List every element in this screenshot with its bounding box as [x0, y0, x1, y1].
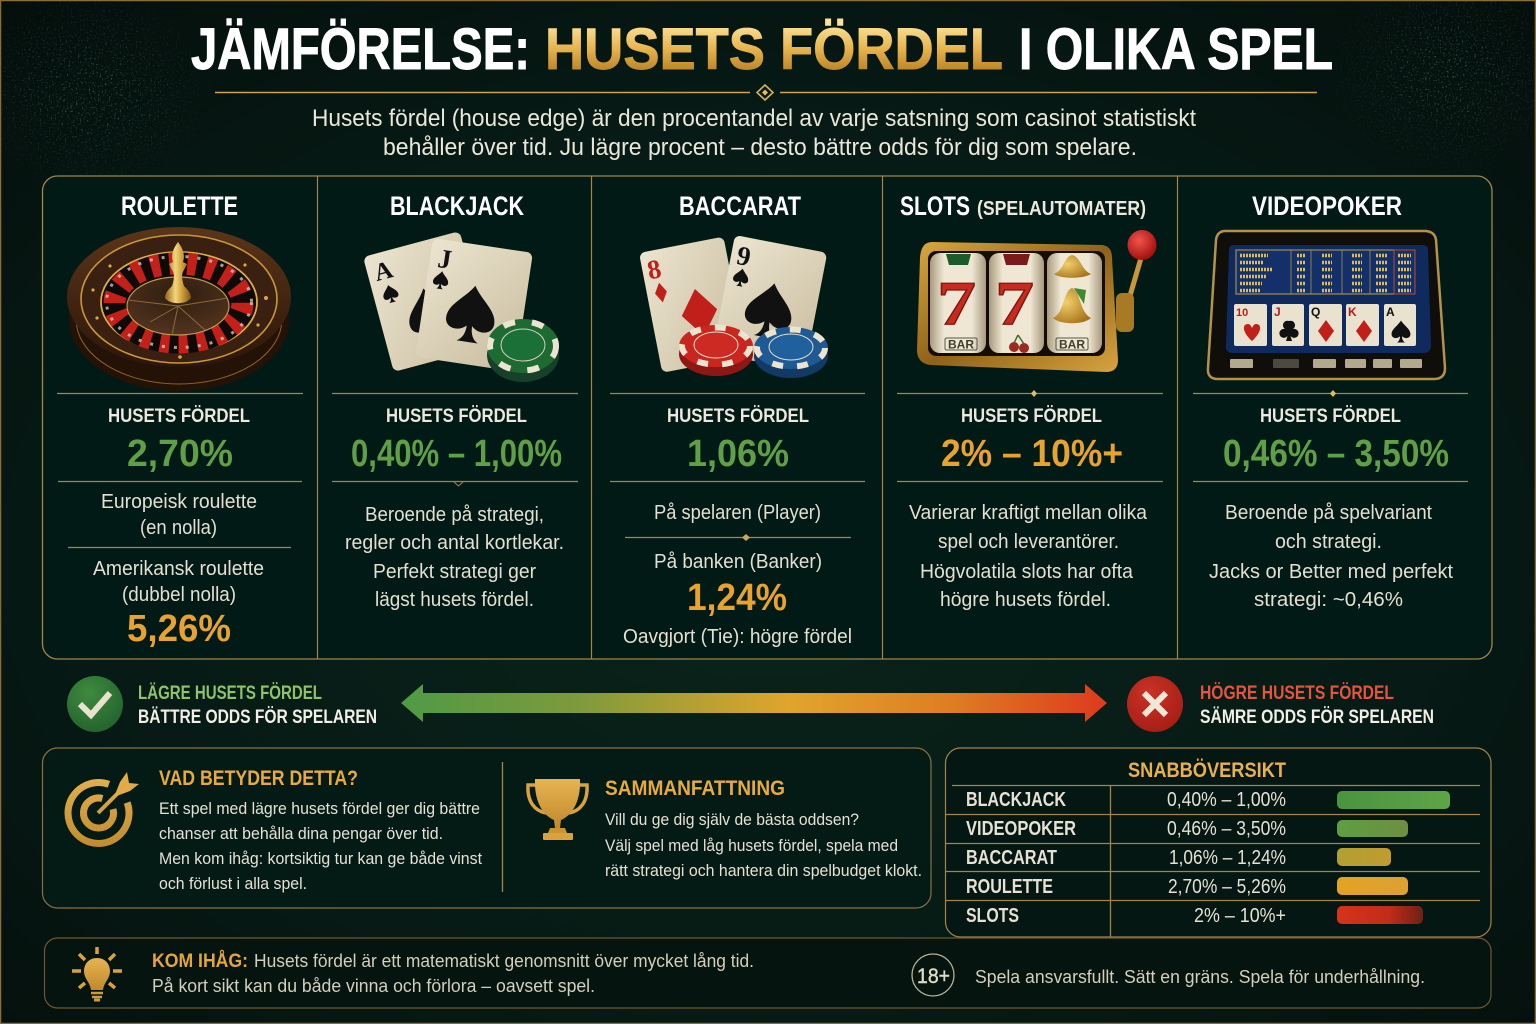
value: player: 1,06%	[687, 433, 789, 475]
label: HUSETS FÖRDEL	[667, 404, 809, 427]
icon: slot machine	[917, 230, 1156, 372]
icon: slot machine: 7	[995, 270, 1034, 338]
heading: blackjack: BLACKJACK	[390, 191, 524, 221]
text: blackjack note	[345, 504, 564, 611]
label: lower edge: LÄGRE HUSETS FÖRDEL	[138, 681, 322, 704]
badge: 18+	[912, 954, 954, 996]
value: european: 2,70%	[127, 433, 233, 475]
text: blackjack note: regler och antal kortlekar.	[345, 532, 564, 554]
row: videopoker: VIDEOPOKER	[966, 818, 1076, 840]
text: reminder	[152, 951, 754, 996]
label: higher edge: HÖGRE HUSETS FÖRDEL	[1200, 681, 1394, 704]
text: european roulette: (en nolla)	[140, 517, 217, 539]
column: videopoker	[1193, 191, 1468, 611]
icon: video poker machine: J	[1274, 305, 1281, 319]
value: 0,40% – 1,00%	[351, 433, 562, 475]
icon: check mark	[67, 676, 123, 732]
icon: cross	[1127, 676, 1183, 732]
text: american roulette: (dubbel nolla)	[122, 584, 236, 606]
text: european roulette: Europeisk roulette	[101, 491, 257, 513]
icon: cards and two chips: 9	[734, 240, 753, 272]
icon: slot machine: BAR	[948, 338, 974, 352]
text: responsible play: Spela ansvarsfullt. Sätt en gräns. Spela för underhållning.	[975, 966, 1425, 987]
intro text: behåller över tid. Ju lägre procent – desto bättre odds för dig som spelare.	[383, 134, 1137, 161]
row: blackjack: 0,40% – 1,00%	[1167, 789, 1286, 811]
title: HUSETS FÖRDEL	[545, 17, 1003, 82]
text: tie: Oavgjort (Tie): högre fördel	[623, 626, 852, 648]
icon: cards and green chip: A	[371, 256, 396, 287]
text: what it means: Ett spel med lägre husets fördel ger dig bättre	[159, 800, 480, 818]
text: blackjack note: Beroende på strategi,	[365, 504, 544, 526]
icon: roulette wheel	[67, 227, 291, 391]
row: slots	[966, 905, 1423, 927]
text: reminder: På kort sikt kan du både vinna och förlora – oavsett spel.	[152, 976, 595, 996]
row: blackjack	[966, 789, 1450, 811]
column: blackjack	[332, 191, 578, 611]
heading: quick overview: SNABBÖVERSIKT	[1128, 759, 1286, 782]
label: HUSETS FÖRDEL	[108, 404, 250, 427]
text: summary: rätt strategi och hantera din spelbudget klokt.	[605, 862, 922, 880]
text: videopoker note: Jacks or Better med perfekt	[1209, 561, 1453, 583]
text: slots note: högre husets fördel.	[940, 589, 1111, 611]
icon: cards and green chip: J	[436, 243, 454, 275]
label: HUSETS FÖRDEL	[961, 404, 1102, 427]
value: 2% – 10%+	[941, 433, 1123, 475]
panel: reminder footer	[44, 938, 1491, 1008]
column: baccarat	[610, 191, 865, 648]
title divider with diamond	[215, 85, 1317, 100]
text: videopoker note	[1209, 502, 1453, 611]
heading: videopoker: VIDEOPOKER	[1252, 191, 1402, 221]
text: what it means: chanser att behålla dina pengar över tid.	[159, 825, 443, 843]
text: slots note: spel och leverantörer.	[938, 531, 1119, 553]
heading: summary: SAMMANFATTNING	[605, 777, 785, 800]
column: slots	[897, 191, 1163, 611]
heading: what it means: VAD BETYDER DETTA?	[159, 767, 358, 790]
title: JÄMFÖRELSE:	[191, 17, 530, 82]
icon: cards and two chips: 8	[645, 253, 664, 285]
label: worse odds: SÄMRE ODDS FÖR SPELAREN	[1200, 705, 1434, 728]
text: slots note: Varierar kraftigt mellan olika	[909, 502, 1148, 524]
panel: explanation and summary	[42, 748, 931, 908]
text: reminder: KOM IHÅG:	[152, 951, 248, 972]
row: baccarat: 1,06% – 1,24%	[1169, 847, 1286, 869]
column: roulette	[57, 191, 303, 650]
panel: quick overview table	[946, 748, 1491, 937]
text: blackjack note: lägst husets fördel.	[375, 589, 534, 611]
icon: video poker machine: 10	[1236, 307, 1248, 319]
text: what it means: Men kom ihåg: kortsiktig tur kan ge både vinst	[159, 850, 482, 868]
row: blackjack: BLACKJACK	[966, 789, 1066, 811]
icon: video poker machine: Q	[1311, 305, 1320, 319]
row: slots: 2% – 10%+	[1194, 905, 1286, 927]
label: HUSETS FÖRDEL	[386, 404, 527, 427]
legend: lower house edge	[67, 676, 377, 732]
label: better odds: BÄTTRE ODDS FÖR SPELAREN	[138, 705, 377, 728]
text: videopoker note: strategi: ~0,46%	[1254, 589, 1403, 611]
label: HUSETS FÖRDEL	[1260, 404, 1401, 427]
icon: light bulb	[72, 947, 122, 1000]
intro text: Husets fördel (house edge) är den procentandel av varje satsning som casinot statistiskt	[312, 105, 1196, 132]
icon: video poker machine: K	[1348, 305, 1357, 319]
icon: trophy	[528, 779, 587, 840]
row: videopoker: 0,46% – 3,50%	[1167, 818, 1286, 840]
text: american roulette	[93, 558, 264, 606]
icon: cards and two chips	[639, 235, 828, 378]
title: I OLIKA SPEL	[1019, 17, 1333, 82]
text: what it means	[159, 800, 482, 893]
heading: roulette: ROULETTE	[121, 191, 238, 221]
text: european roulette	[101, 491, 257, 539]
text: american roulette: Amerikansk roulette	[93, 558, 264, 580]
value: american: 5,26%	[127, 608, 231, 650]
row: videopoker	[966, 818, 1408, 840]
text: banker: På banken (Banker)	[654, 551, 822, 573]
value: banker: 1,24%	[687, 577, 787, 619]
panel: comparison of five games	[42, 176, 1492, 659]
text: reminder: Husets fördel är ett matematiskt genomsnitt över mycket lång tid.	[254, 951, 754, 971]
row: roulette: ROULETTE	[966, 876, 1053, 898]
legend: higher house edge	[1127, 676, 1434, 732]
value: 0,46% – 3,50%	[1223, 433, 1449, 475]
heading: slots: SLOTS	[900, 191, 970, 221]
intro text	[312, 105, 1196, 161]
row: roulette	[966, 876, 1408, 898]
text: slots note: Högvolatila slots har ofta	[920, 561, 1134, 583]
text: videopoker note: och strategi.	[1275, 531, 1382, 553]
icon: slot machine: BAR	[1059, 338, 1085, 352]
text: slots note	[909, 502, 1148, 611]
row: roulette: 2,70% – 5,26%	[1168, 876, 1286, 898]
row: baccarat	[966, 847, 1391, 869]
text: blackjack note: Perfekt strategi ger	[373, 561, 536, 583]
text: what it means: och förlust i alla spel.	[159, 875, 307, 893]
icon: cards and green chip	[363, 231, 559, 382]
row: baccarat: BACCARAT	[966, 847, 1057, 869]
icon: video poker machine	[1208, 231, 1445, 379]
title	[191, 17, 1333, 82]
icon: video poker machine: A	[1386, 305, 1395, 319]
text: player: På spelaren (Player)	[654, 502, 821, 524]
text: summary: Välj spel med låg husets fördel, spela med	[605, 837, 898, 855]
icon: target with arrow	[68, 772, 139, 843]
row: slots: SLOTS	[966, 905, 1019, 927]
heading: slots	[900, 191, 1146, 221]
heading: slots: (SPELAUTOMATER)	[977, 197, 1146, 220]
arrow: scale from low to high edge	[401, 684, 1107, 722]
text: summary: Vill du ge dig själv de bästa oddsen?	[605, 811, 859, 829]
text: summary	[605, 811, 922, 880]
text: videopoker note: Beroende på spelvariant	[1225, 502, 1432, 524]
icon: slot machine: 7	[937, 270, 976, 338]
badge: 18+: 18+	[917, 965, 950, 988]
heading: baccarat: BACCARAT	[679, 191, 801, 221]
